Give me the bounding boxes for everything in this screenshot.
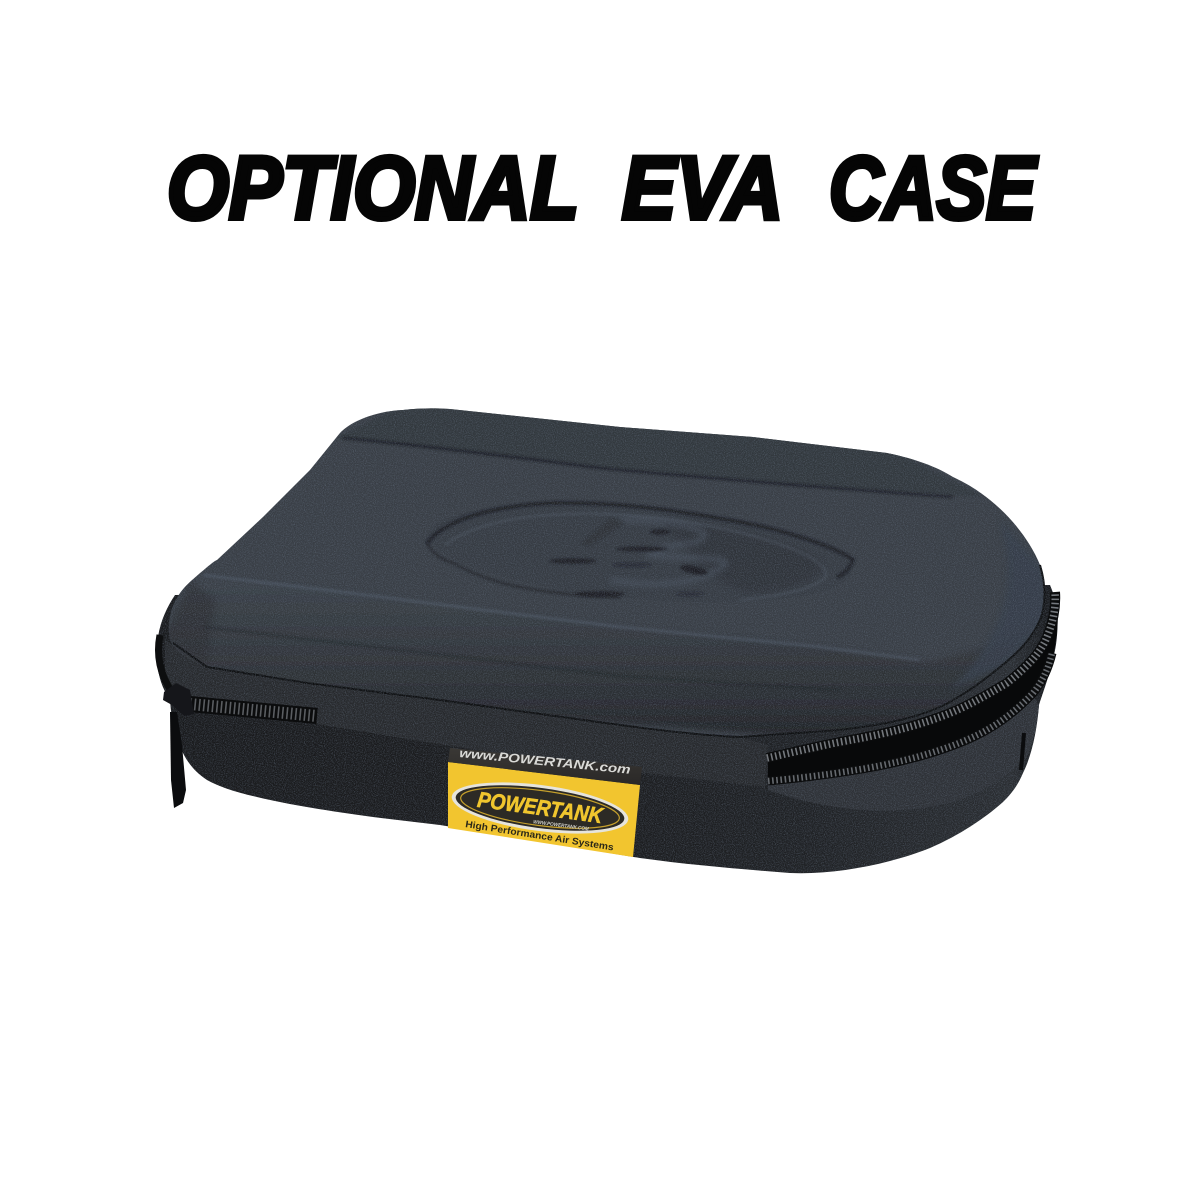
oval right shadow <box>660 520 823 593</box>
slider <box>163 683 194 716</box>
oval fill <box>425 489 855 617</box>
oval rim <box>449 774 631 842</box>
upper teeth <box>767 592 1055 758</box>
title <box>167 138 1038 238</box>
logo small url: WWW.POWERTANK.COM <box>533 819 590 833</box>
title: EVA <box>622 138 783 238</box>
oval inner highlight <box>445 514 826 600</box>
embossed logo marks <box>549 518 709 597</box>
zipper flap <box>165 640 768 787</box>
product label <box>448 746 642 857</box>
lower teeth <box>768 653 1052 781</box>
right edge shading <box>960 558 1040 684</box>
front ridge highlight <box>203 575 920 660</box>
embossed logo oval <box>425 489 855 617</box>
lid shading <box>160 405 1048 740</box>
dark url band <box>448 748 642 785</box>
product photo: zippered EVA case <box>157 405 1058 873</box>
upper teeth highlights <box>767 592 1055 758</box>
zipper: right double teeth <box>158 592 1058 781</box>
logo oval <box>449 774 631 842</box>
yellow label <box>448 762 640 857</box>
top groove <box>343 438 953 497</box>
oval outer dark arc <box>427 503 853 577</box>
case fabric shell <box>157 405 1058 873</box>
black zipper gap <box>768 592 1058 780</box>
right side end seam <box>1021 733 1024 770</box>
oval lower edge <box>427 543 620 597</box>
right side lower fabric <box>768 696 1039 811</box>
zipper pull <box>163 683 194 808</box>
left curved teeth <box>158 635 172 692</box>
left teeth highlights <box>190 704 317 716</box>
title: CASE <box>829 138 1038 238</box>
pull tab <box>170 712 186 808</box>
left corner shading <box>170 582 214 646</box>
logo word: POWERTANK <box>476 787 606 828</box>
lower rim crease <box>205 627 840 690</box>
left teeth <box>190 704 317 716</box>
logo highlight <box>610 520 725 584</box>
oval dark <box>453 777 627 839</box>
lower teeth highlights <box>768 653 1052 781</box>
top band of lid <box>335 405 985 497</box>
oval inner line <box>458 780 622 836</box>
title: OPTIONAL <box>167 138 579 238</box>
lower case body <box>157 585 1058 873</box>
label tagline: High Performance Air Systems <box>465 819 614 853</box>
label url: www.POWERTANK.com <box>459 746 631 777</box>
lid lower seam <box>173 565 1044 737</box>
lid <box>169 408 1044 737</box>
front rim of lid <box>160 578 1040 740</box>
